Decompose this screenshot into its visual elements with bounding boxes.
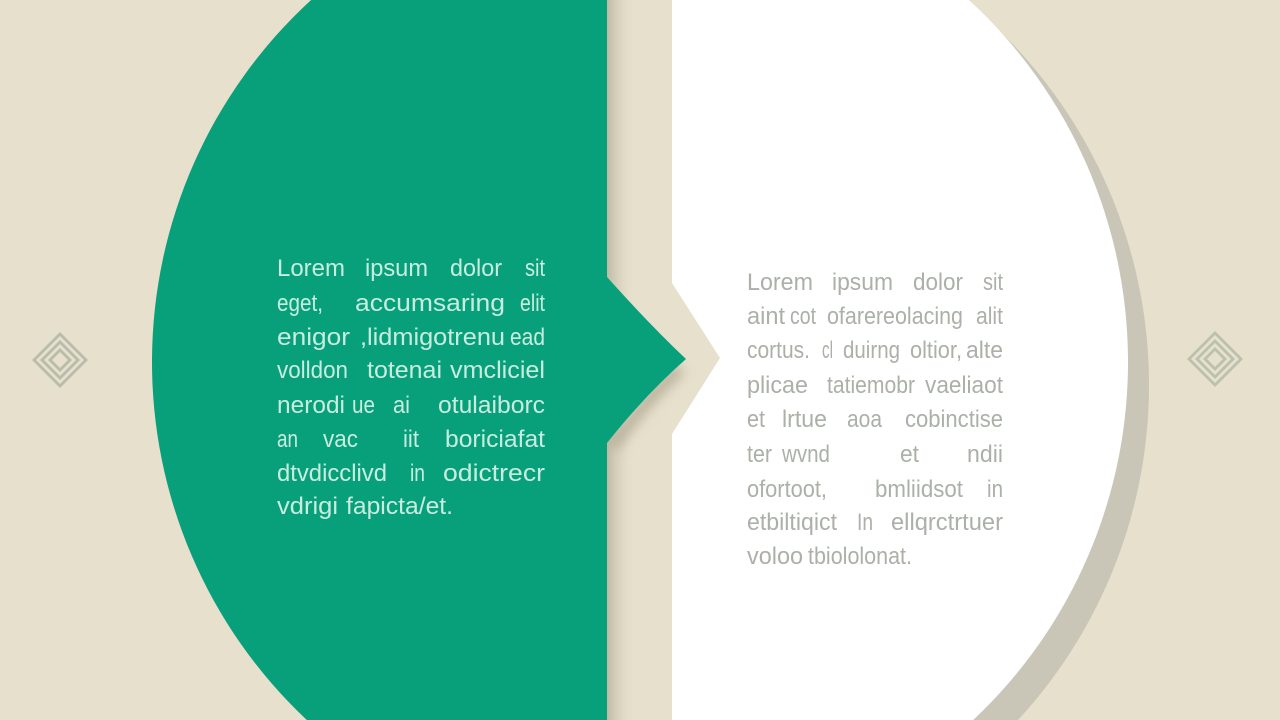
left text block: odictrecr (443, 460, 545, 487)
left text block: dolor (450, 255, 502, 282)
right text block: cot (790, 303, 816, 330)
right text block: cl (822, 337, 833, 364)
left text block: vdrigi (277, 493, 338, 520)
left text block: ead (510, 324, 545, 351)
right text block: cortus. (747, 337, 810, 364)
right text block: sit (983, 269, 1003, 296)
right text block: ofortoot, (747, 476, 827, 503)
left text block: enigor (277, 324, 350, 351)
right text block (747, 269, 1003, 570)
right text block: etbiltiqict (747, 509, 837, 536)
right text block: voloo (747, 543, 803, 570)
left text block: volldon (277, 357, 348, 384)
left text block: vmcliciel (450, 357, 545, 384)
gap shadow band (607, 0, 635, 720)
left text block: ,lidmigotrenu (360, 324, 505, 351)
right text block: aint (747, 303, 785, 330)
left text block (277, 255, 545, 520)
left text block: elit (520, 290, 545, 317)
right text block: wvnd (781, 441, 830, 468)
left diamond icon (34, 334, 86, 386)
left text block: vac (323, 426, 358, 453)
right text block: bmliidsot (875, 476, 963, 503)
white right panel (672, 0, 1128, 720)
right text block: ndii (967, 441, 1003, 468)
left text block: accumsaring (355, 290, 505, 317)
left text block: an (277, 426, 298, 453)
right text block: vaeliaot (925, 372, 1003, 399)
left text block: dtvdicclivd (277, 460, 387, 487)
right text block: et (900, 441, 919, 468)
left text block: fapicta/et. (346, 493, 453, 520)
right text block: duirng (843, 337, 900, 364)
right text block: tbiololonat. (808, 543, 912, 570)
left text block: nerodi (277, 392, 345, 419)
right text block: aoa (847, 406, 883, 433)
right text block: et (747, 406, 765, 433)
right text block: ofarereolacing (827, 303, 963, 330)
right text block: alte (966, 337, 1003, 364)
left text block: Lorem (277, 255, 345, 282)
circle drop shadow (730, 0, 1149, 720)
right text block: lrtue (782, 406, 827, 433)
left text block: otulaiborc (438, 392, 545, 419)
green left panel with arrow (152, 0, 686, 720)
left text block: ue (352, 392, 375, 419)
right text block: in (987, 476, 1003, 503)
right text block: Lorem (747, 269, 813, 296)
right text block: tatiemobr (827, 372, 915, 399)
right text block: ellqrctrtuer (891, 509, 1003, 536)
right text block: ipsum (832, 269, 893, 296)
right text block: cobinctise (905, 406, 1003, 433)
left text block: sit (525, 255, 545, 282)
left text block: ai (393, 392, 410, 419)
right text block: alit (976, 303, 1003, 330)
right text block: In (857, 509, 873, 536)
right text block: dolor (913, 269, 963, 296)
left text block: iit (403, 426, 419, 453)
right text block: oltior, (910, 337, 962, 364)
left text block: eget, (277, 290, 323, 317)
left text block: totenai (367, 357, 442, 384)
left text block: boriciafat (445, 426, 545, 453)
right text block: plicae (747, 372, 808, 399)
right diamond icon (1189, 333, 1241, 385)
arrow shadow (612, 368, 680, 446)
right text block: ter (747, 441, 772, 468)
left text block: in (410, 460, 425, 487)
left text block: ipsum (365, 255, 428, 282)
